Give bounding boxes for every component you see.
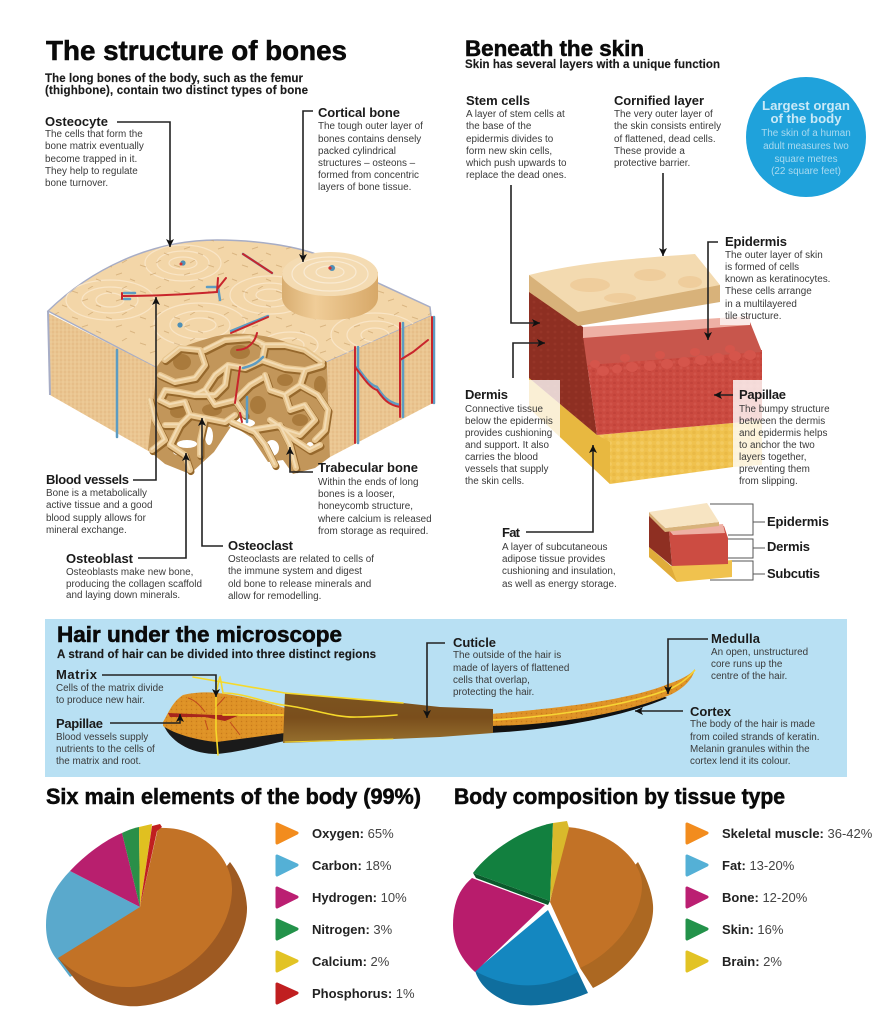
label: epidermis: Epidermis xyxy=(725,234,787,249)
label: osteoblast xyxy=(66,551,202,601)
illustration: skin layers xyxy=(529,240,765,484)
label: cuticle: made of layers of flattened xyxy=(453,663,569,674)
pie chart: elements xyxy=(46,824,247,1006)
legend item: oxygen xyxy=(277,824,394,843)
label: cuticle xyxy=(453,635,569,698)
label: blood vessels: mineral exchange. xyxy=(46,525,127,536)
label: cortical bone: bones contains densely xyxy=(318,134,421,145)
label: osteoblast: producing the collagen scaffold xyxy=(66,579,202,590)
label: osteocyte: become trapped in it. xyxy=(45,154,137,165)
label: cortical bone: packed cylindrical xyxy=(318,146,396,157)
label: epidermis: is formed of cells xyxy=(725,262,799,273)
label: medulla xyxy=(711,631,808,682)
label: fat: A layer of subcutaneous xyxy=(502,542,607,553)
label: papillae hair: Blood vessels supply xyxy=(56,732,148,743)
label: papillae: The bumpy structure xyxy=(739,404,830,415)
arrow: dermis xyxy=(513,343,545,378)
label: subcutis small: Subcutis xyxy=(767,566,820,581)
legend item: skeletal muscle xyxy=(687,824,873,843)
label: trabecular bone: Trabecular bone xyxy=(318,460,418,475)
arrow: medulla xyxy=(668,639,708,694)
label: blood vessels: Blood vessels xyxy=(46,472,129,487)
callout: largest organ: of the body xyxy=(770,111,842,126)
label: trabecular bone: Within the ends of long xyxy=(318,477,418,488)
dermis layer xyxy=(529,290,762,435)
label: stem cells: A layer of stem cells at xyxy=(466,109,565,120)
label: medulla: centre of the hair. xyxy=(711,671,787,682)
label: fat: cushioning and insulation, xyxy=(502,566,616,577)
label: stem cells: replace the dead ones. xyxy=(466,170,566,181)
legend item: carbon xyxy=(277,856,392,875)
arrow: osteocyte xyxy=(117,122,170,247)
label: papillae: and epidermis helps xyxy=(739,428,827,439)
label: papillae: to anchor the two xyxy=(739,440,815,451)
legend item: hydrogen xyxy=(277,888,407,907)
legend item: carbon: Carbon: 18% xyxy=(312,858,392,873)
legend: tissue xyxy=(687,824,873,971)
arrow: papillae hair xyxy=(110,714,180,723)
label: osteoblast: Osteoblast xyxy=(66,551,134,566)
label: osteocyte: They help to regulate xyxy=(45,166,138,177)
arrow: fat xyxy=(526,445,593,532)
yellow outlines xyxy=(193,677,403,755)
callout: largest organ xyxy=(746,77,866,197)
label: cuticle: cells that overlap, xyxy=(453,675,530,686)
label: epidermis small: Epidermis xyxy=(767,514,829,529)
brackets: skin layers xyxy=(710,504,765,580)
cornified layer xyxy=(529,254,720,326)
label: osteoclast: old bone to release minerals and xyxy=(228,579,371,590)
label: stem cells: Stem cells xyxy=(466,93,530,108)
subtitle: bones: (thighbone), contain two distinct types of bone xyxy=(45,85,308,97)
label: trabecular bone: bones is a looser, xyxy=(318,489,395,500)
label: osteoblast: Osteoblasts make new bone, xyxy=(66,567,193,578)
legend item: nitrogen xyxy=(277,920,393,939)
label: osteocyte: bone turnover. xyxy=(45,178,108,189)
heading: body composition: Body composition by tissue type xyxy=(454,784,785,809)
top face of bone xyxy=(48,240,431,368)
callout: largest organ: adult measures two xyxy=(763,141,849,152)
label: stem cells: epidermis divides to xyxy=(466,134,554,145)
label: osteoblast: and laying down minerals. xyxy=(66,590,180,601)
arrow: trabecular bone xyxy=(290,447,313,472)
hair shaft xyxy=(283,693,493,743)
label: osteocyte: bone matrix eventually xyxy=(45,141,144,152)
title: hair: Hair under the microscope xyxy=(57,622,342,647)
arrow: cortical bone xyxy=(303,111,313,262)
label: epidermis: These cells arrange xyxy=(725,286,812,297)
arrow: cortex xyxy=(635,710,683,712)
label: cortex: cortex lend it its colour. xyxy=(690,756,790,767)
legend item: brain: Brain: 2% xyxy=(722,954,782,969)
label: cortex: Melanin granules within the xyxy=(690,744,810,755)
label: papillae hair xyxy=(56,716,155,767)
arrow: matrix xyxy=(102,675,216,697)
label: dermis: carries the blood xyxy=(465,452,538,463)
callout: largest organ: square metres xyxy=(774,154,838,165)
label: stem cells: form new skin cells, xyxy=(466,146,552,157)
heading: six main elements: Six main elements of the body (99%) xyxy=(46,784,421,809)
legend item: fat: Fat: 13-20% xyxy=(722,858,795,873)
label: trabecular bone: where calcium is released xyxy=(317,514,432,525)
title: beneath the skin: Beneath the skin xyxy=(465,36,644,61)
label: blood vessels: Bone is a metabolically xyxy=(46,488,147,499)
label: cortex: The body of the hair is made xyxy=(690,719,816,730)
label: cortex xyxy=(690,704,820,767)
label: epidermis xyxy=(725,234,830,322)
callout: largest organ: The skin of a human xyxy=(761,128,851,139)
label: papillae: layers together, xyxy=(739,452,807,463)
legend item: bone xyxy=(687,888,808,907)
arrow: stem cells xyxy=(511,185,540,323)
label: cornified layer: of flattened, dead cells. xyxy=(614,134,716,145)
label: osteocyte: The cells that form the xyxy=(45,129,143,140)
label: matrix: to produce new hair. xyxy=(56,695,145,706)
illustration: bone block cross-section xyxy=(48,240,434,474)
title: the structure of bones: The structure of bones xyxy=(46,35,347,66)
label: stem cells xyxy=(465,93,567,181)
label: dermis: provides cushioning xyxy=(465,428,552,439)
arrow: papillae xyxy=(714,394,733,396)
label: blood vessels: active tissue and a good xyxy=(46,500,153,511)
label: dermis: Dermis xyxy=(465,387,508,402)
label: cornified layer: These provide a xyxy=(614,146,685,157)
left face of bone xyxy=(48,313,157,452)
legend item: brain xyxy=(687,952,782,971)
label: fat xyxy=(502,525,617,590)
subtitle: bones xyxy=(45,73,308,97)
label: trabecular bone: from storage as required. xyxy=(318,526,428,537)
label: cornified layer xyxy=(614,93,721,169)
label: cortical bone: The tough outer layer of xyxy=(318,121,423,132)
right face of bone xyxy=(327,316,433,457)
label: cornified layer: The very outer layer of xyxy=(614,109,713,120)
label: osteocyte: Osteocyte xyxy=(45,114,108,129)
label: osteoclast xyxy=(228,538,374,602)
legend item: calcium: Calcium: 2% xyxy=(312,954,390,969)
label: trabecular bone xyxy=(317,460,432,537)
label: cortical bone xyxy=(318,105,423,193)
label: matrix: Matrix xyxy=(56,667,98,682)
label: medulla: core runs up the xyxy=(711,659,783,670)
legend item: phosphorus xyxy=(277,984,415,1003)
legend item: oxygen: Oxygen: 65% xyxy=(312,826,394,841)
label: dermis xyxy=(465,387,553,487)
arrow: blood vessels xyxy=(133,297,156,480)
legend item: calcium xyxy=(277,952,390,971)
label: dermis: the skin cells. xyxy=(465,476,524,487)
label: papillae: from slipping. xyxy=(739,476,798,487)
legend item: bone: Bone: 12-20% xyxy=(722,890,808,905)
label: cornified layer: protective barrier. xyxy=(614,158,690,169)
label: blood vessels: blood supply allows for xyxy=(46,513,147,524)
label: cuticle: protecting the hair. xyxy=(453,687,534,698)
label: cortex: from coiled strands of keratin. xyxy=(690,732,820,743)
legend item: skin: Skin: 16% xyxy=(722,922,784,937)
trabecular honeycomb xyxy=(148,334,330,474)
label: stem cells: which push upwards to xyxy=(465,158,567,169)
label: fat: Fat xyxy=(502,525,521,540)
label: cortical bone: structures – osteons – xyxy=(318,158,416,169)
panel: hair under the microscope xyxy=(45,619,847,777)
hair tip xyxy=(490,669,695,733)
small skin diagram xyxy=(649,503,732,582)
legend item: phosphorus: Phosphorus: 1% xyxy=(312,986,415,1001)
label: epidermis: known as keratinocytes. xyxy=(725,274,830,285)
label: cornified layer: the skin consists entirely xyxy=(614,121,721,132)
legend: elements xyxy=(277,824,415,1003)
label: matrix xyxy=(56,667,164,706)
label: dermis: and support. It also xyxy=(465,440,549,451)
hair root xyxy=(163,692,285,754)
subtitle: bones: The long bones of the body, such as the femur xyxy=(45,73,304,85)
label: medulla: Medulla xyxy=(711,631,761,646)
label: papillae hair: nutrients to the cells of xyxy=(56,744,155,755)
arrow: osteoblast xyxy=(138,453,186,558)
label: fat: adipose tissue provides xyxy=(502,554,605,565)
label: cortex: Cortex xyxy=(690,704,732,719)
subtitle: skin: Skin has several layers with a unique function xyxy=(465,59,720,71)
label: epidermis: The outer layer of skin xyxy=(725,250,823,261)
label: dermis: vessels that supply xyxy=(465,464,548,475)
label: cuticle: The outside of the hair is xyxy=(453,650,561,661)
label: papillae: preventing them xyxy=(739,464,810,475)
label: cornified layer: Cornified layer xyxy=(614,93,704,108)
legend item: skin xyxy=(687,920,784,939)
label: stem cells: the base of the xyxy=(466,121,532,132)
label: dermis: below the epidermis xyxy=(465,416,553,427)
translucent text panels xyxy=(529,240,765,470)
label: cortical bone: Cortical bone xyxy=(318,105,400,120)
label: osteoclast: Osteoclast xyxy=(228,538,294,553)
legend item: hydrogen: Hydrogen: 10% xyxy=(312,890,407,905)
label: papillae: between the dermis xyxy=(739,416,825,427)
label: dermis: Connective tissue xyxy=(465,404,543,415)
label: epidermis: in a multilayered xyxy=(725,299,797,310)
label: cuticle: Cuticle xyxy=(453,635,496,650)
illustration: hair strand xyxy=(163,669,695,755)
label: trabecular bone: honeycomb structure, xyxy=(318,501,413,512)
label: osteocyte xyxy=(45,114,144,189)
blood vessels xyxy=(117,254,434,443)
legend item: fat xyxy=(687,856,795,875)
label: papillae xyxy=(739,387,830,487)
arrow: cornified layer xyxy=(662,173,664,256)
label: medulla: An open, unstructured xyxy=(711,647,808,658)
arrow: osteoclast xyxy=(202,418,223,546)
fat layer xyxy=(529,378,762,484)
arrow: cuticle xyxy=(427,643,445,718)
label: cortical bone: layers of bone tissue. xyxy=(318,182,411,193)
label: papillae: Papillae xyxy=(739,387,786,402)
label: osteoclast: the immune system and digest xyxy=(228,566,362,577)
label: papillae hair: Papillae xyxy=(56,716,103,731)
arrow: epidermis xyxy=(708,242,718,340)
label: blood vessels xyxy=(46,472,153,536)
label: cortical bone: formed from concentric xyxy=(318,170,419,181)
callout: largest organ: Largest organ xyxy=(762,98,850,113)
callout: largest organ: (22 square feet) xyxy=(771,166,841,177)
subtitle: hair: A strand of hair can be divided into three distinct regions xyxy=(57,649,376,661)
legend item: nitrogen: Nitrogen: 3% xyxy=(312,922,393,937)
label: osteoclast: Osteoclasts are related to cells of xyxy=(228,554,374,565)
label: epidermis: tile structure. xyxy=(725,311,782,322)
legend item: skeletal muscle: Skeletal muscle: 36-42% xyxy=(722,826,873,841)
label: matrix: Cells of the matrix divide xyxy=(56,683,164,694)
cortical bone osteon cylinder xyxy=(282,252,378,320)
label: papillae hair: the matrix and root. xyxy=(56,756,141,767)
pie chart: tissue xyxy=(453,821,653,1005)
label: dermis small: Dermis xyxy=(767,539,810,554)
label: osteoclast: allow for remodelling. xyxy=(228,591,321,602)
label: fat: as well as energy storage. xyxy=(502,579,617,590)
